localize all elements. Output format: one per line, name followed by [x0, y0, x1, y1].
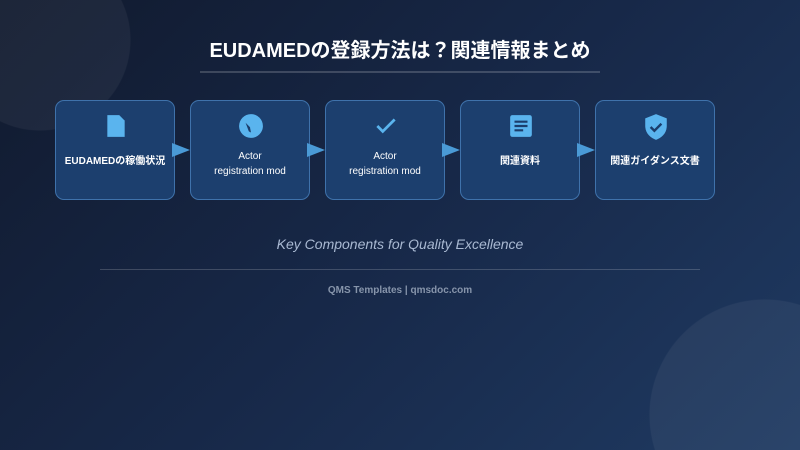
subtitle: Key Components for Quality Excellence [277, 236, 523, 252]
icon: document [107, 115, 125, 137]
arrow 2 [307, 143, 325, 157]
arrow 4 [577, 143, 595, 157]
icon: globe [239, 114, 263, 138]
label: registration mod [214, 166, 286, 177]
icon: shield [645, 114, 667, 140]
icon: check [376, 118, 396, 134]
label: EUDAMEDの稼働状況 [65, 156, 165, 167]
step 3 [325, 100, 445, 200]
arrow 1 [172, 143, 190, 157]
icon: list document [510, 115, 532, 137]
arrow 3 [442, 143, 460, 157]
label: registration mod [349, 166, 421, 177]
label: Actor [373, 151, 397, 162]
step 1 [55, 100, 175, 200]
step 2 [190, 100, 310, 200]
step 4 [460, 100, 580, 200]
title: EUDAMEDの登録方法は？関連情報まとめ [209, 40, 591, 62]
label: 関連ガイダンス文書 [610, 156, 700, 167]
step 5 [595, 100, 715, 200]
label: 関連資料 [500, 156, 540, 167]
label [214, 151, 286, 177]
label: Actor [238, 151, 262, 162]
footer: QMS Templates | qmsdoc.com [328, 285, 472, 296]
label [349, 151, 421, 177]
